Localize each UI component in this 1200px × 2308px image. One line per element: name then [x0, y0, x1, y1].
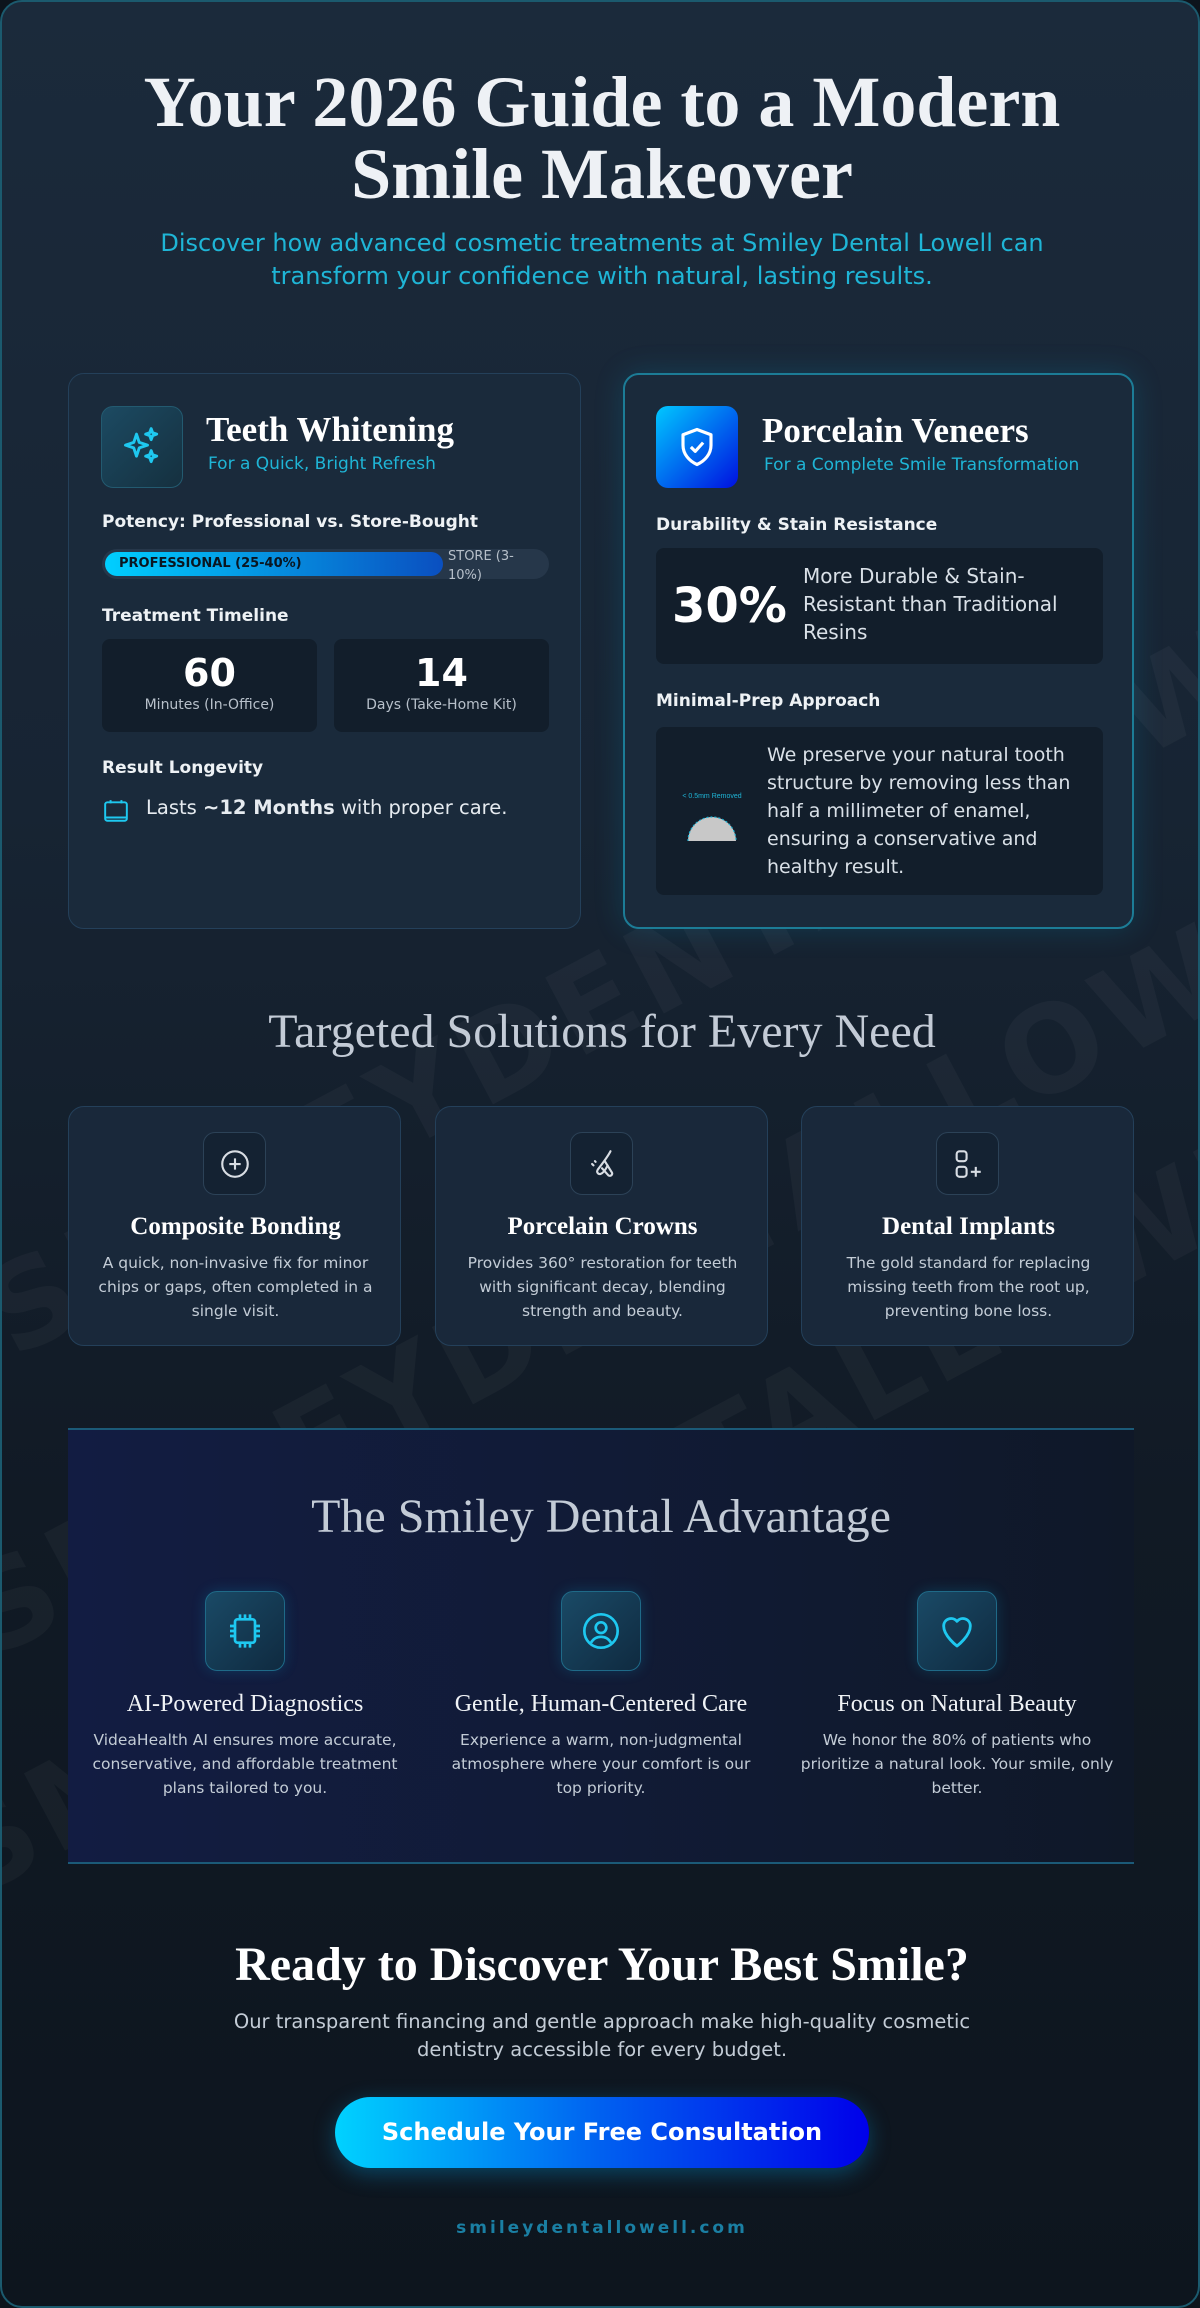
- panel: porcelain crowns: [435, 1106, 768, 1346]
- panel: porcelain veneers: For a Complete Smile Transformation: [764, 455, 1079, 475]
- panel: teeth whitening: For a Quick, Bright Refresh: [208, 454, 436, 474]
- durability stat: More Durable & Stain-Resistant than Traditional Resins: [803, 564, 1058, 644]
- feature: natural beauty: Focus on Natural Beauty: [837, 1691, 1077, 1717]
- panel: teeth whitening: [68, 373, 581, 929]
- CTA text: [234, 2010, 970, 2061]
- icon: tooth diagram: < 0.5mm Removed: [682, 793, 742, 800]
- title: Your 2026 Guide to a Modern: [144, 62, 1060, 142]
- durability stat: 30%: [672, 578, 787, 634]
- heading: The Smiley Dental Advantage: [311, 1490, 891, 1543]
- durability stat: Durability & Stain Resistance: [656, 515, 937, 535]
- CTA text: Our transparent financing and gentle approach make high-quality cosmetic: [234, 2010, 970, 2033]
- potency bar: [102, 512, 549, 583]
- subtitle: Discover how advanced cosmetic treatments at Smiley Dental Lowell can: [160, 229, 1044, 257]
- subtitle: [160, 229, 1044, 290]
- icon: shapes plus: [936, 1132, 999, 1195]
- treatment timeline: 60: [183, 651, 236, 695]
- feature: gentle care: Gentle, Human-Centered Care: [455, 1691, 747, 1717]
- CTA text: dentistry accessible for every budget.: [417, 2038, 787, 2061]
- result longevity: [102, 758, 507, 822]
- icon: tooth diagram: [682, 792, 742, 841]
- panel: porcelain crowns: Porcelain Crowns: [507, 1213, 698, 1240]
- feature: natural beauty: We honor the 80% of patients who prioritize a natural look. Your smile, only better.: [801, 1731, 1113, 1797]
- potency bar: STORE (3-: [448, 549, 514, 564]
- potency bar: Potency: Professional vs. Store-Bought: [102, 512, 478, 532]
- treatment timeline: [102, 606, 549, 732]
- heading: targeted solutions: Targeted Solutions for Every Need: [268, 1005, 936, 1058]
- panel: dental implants: Dental Implants: [882, 1213, 1055, 1240]
- footer url: smileydentallowell.com: [456, 2218, 748, 2238]
- panel: porcelain veneers: [623, 373, 1134, 929]
- panel: dental implants: [801, 1106, 1134, 1346]
- icon: shield: [656, 406, 738, 488]
- treatment timeline: Days (Take-Home Kit): [366, 697, 517, 713]
- panel: porcelain crowns: Provides 360° restoration for teeth with significant decay, blending strength and beauty.: [468, 1254, 737, 1320]
- title: [144, 62, 1060, 214]
- CTA heading: Ready to Discover Your Best Smile?: [235, 1938, 969, 1991]
- treatment timeline: Treatment Timeline: [102, 606, 289, 626]
- subtitle: transform your confidence with natural, lasting results.: [271, 262, 933, 290]
- feature: gentle care: [452, 1586, 750, 1797]
- treatment timeline: Minutes (In-Office): [145, 697, 274, 713]
- panel: advantage: [68, 1428, 1134, 1864]
- icon: plus circle: [203, 1132, 266, 1195]
- potency bar: 10%): [448, 568, 482, 583]
- icon: sparkles: [101, 406, 183, 488]
- button: Schedule Your Free Consultation: [382, 2118, 822, 2146]
- button: [335, 2097, 869, 2168]
- result longevity: Lasts ~12 Months with proper care.: [146, 796, 507, 819]
- heading: Porcelain Veneers: [762, 411, 1029, 450]
- panel: composite bonding: A quick, non-invasive fix for minor chips or gaps, often completed in a single visit.: [98, 1254, 373, 1320]
- panel: dental implants: The gold standard for replacing missing teeth from the root up, preventing bone loss.: [847, 1254, 1090, 1320]
- treatment timeline: 14: [415, 651, 468, 695]
- icon: tool: [570, 1132, 633, 1195]
- durability stat: [656, 515, 1103, 664]
- panel: composite bonding: Composite Bonding: [130, 1213, 341, 1240]
- feature: natural beauty: [801, 1586, 1113, 1797]
- minimal prep: Minimal-Prep Approach: [656, 691, 880, 711]
- minimal prep: We preserve your natural tooth structure by removing less than half a millimeter of enamel, ensuring a conservative and healthy result.: [767, 744, 1070, 878]
- result longevity: Result Longevity: [102, 758, 263, 778]
- potency bar: PROFESSIONAL (25-40%): [119, 556, 302, 571]
- feature: AI diagnostics: [92, 1587, 398, 1797]
- minimal prep: [656, 691, 1103, 895]
- heading: Teeth Whitening: [206, 410, 454, 449]
- feature: gentle care: Experience a warm, non-judgmental atmosphere where your comfort is our top priority.: [452, 1731, 750, 1797]
- title: Smile Makeover: [351, 134, 853, 214]
- feature: AI diagnostics: AI-Powered Diagnostics: [127, 1691, 363, 1717]
- feature: AI diagnostics: VideaHealth AI ensures more accurate, conservative, and affordable treatment plans tailored to you.: [92, 1731, 397, 1797]
- panel: composite bonding: [68, 1106, 401, 1346]
